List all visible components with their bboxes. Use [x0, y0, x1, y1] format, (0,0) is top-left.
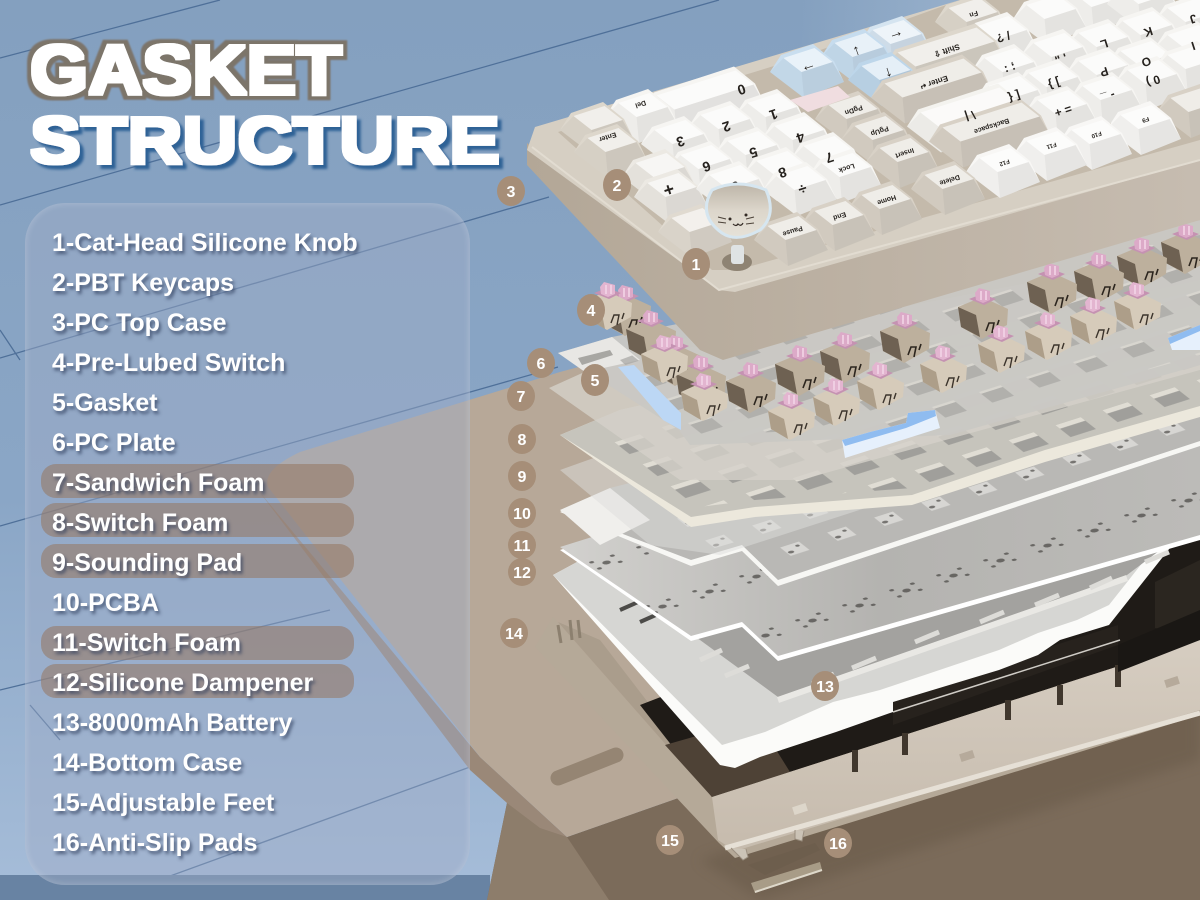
- part 2: keycaps: →: [844, 42, 865, 61]
- part 2: keycaps: +: [661, 179, 677, 201]
- part 2: keycaps: ; :: [1003, 60, 1018, 77]
- part 2: keycaps: 1: [767, 106, 780, 124]
- item 1: 1-Cat-Head Silicone Knob: [52, 229, 358, 257]
- part 2: keycaps: 5: [747, 144, 760, 162]
- part 2: keycaps: = +: [1053, 101, 1074, 120]
- part 12: silicone dampener: [553, 400, 1200, 768]
- stamped metal layer: [590, 420, 1200, 700]
- numbered markers: [497, 169, 852, 858]
- part 2: keycaps: 8: [776, 164, 789, 182]
- item 5: 5-Gasket: [52, 389, 158, 417]
- part 2: keycaps: Shift ⇧: [933, 42, 961, 59]
- part 4: switches: [585, 223, 1200, 440]
- part 13: battery: [893, 560, 1200, 725]
- part 10: PCBA: [560, 338, 1200, 586]
- numbered markers: 8: [518, 432, 527, 449]
- numbered markers: 1: [692, 257, 701, 274]
- item 9: 9-Sounding Pad: [52, 549, 242, 577]
- item 13: 13-8000mAh Battery: [52, 709, 292, 737]
- part 2: keycaps: P: [1098, 64, 1110, 80]
- part 2: keycaps: 0 ): [1144, 72, 1162, 90]
- part 2: keycaps: Fn: [968, 9, 979, 18]
- part 1: cat-head silicone knob: [706, 184, 770, 271]
- item 2: 2-PBT Keycaps: [52, 269, 234, 297]
- highlight: sandwich foam: [41, 464, 354, 498]
- part 15: adjustable feet: [731, 830, 804, 860]
- part 2: keycaps: F9: [1140, 115, 1150, 123]
- numbered markers: 3: [507, 184, 516, 201]
- numbered markers: 12: [513, 565, 531, 582]
- numbered markers: 5: [591, 373, 600, 390]
- part 2: keycaps: 7: [823, 149, 836, 167]
- part 2: keycaps: O: [1140, 54, 1153, 70]
- numbered markers: 14: [505, 626, 523, 643]
- part 2: keycaps: Insert: [894, 146, 915, 159]
- item 8: 8-Switch Foam: [52, 509, 228, 537]
- part 2: keycaps: F10: [1090, 129, 1102, 139]
- part 2: keycaps: Del: [634, 98, 647, 108]
- part 7: sandwich foam: [549, 250, 1200, 480]
- part 2: keycaps: / ?: [994, 28, 1012, 46]
- part 2: keycaps: PgDn: [844, 103, 863, 116]
- part 2: keycaps: 3: [674, 133, 687, 151]
- part 2: keycaps: - _: [1099, 88, 1117, 106]
- numbered markers: 10: [513, 506, 531, 523]
- highlight: switch foam: [41, 503, 354, 537]
- part 2: keycaps: J: [1188, 11, 1199, 26]
- part 2: keycaps: →: [880, 62, 901, 81]
- part 14: bottom case: [535, 540, 1200, 858]
- part 9: sounding pad: [560, 310, 1200, 555]
- numbered markers: 4: [587, 303, 596, 320]
- item 6: 6-PC Plate: [52, 429, 176, 457]
- numbered markers: 13: [816, 679, 834, 696]
- part 2: keycaps: L: [1099, 36, 1110, 52]
- numbered markers: 11: [514, 538, 531, 555]
- item 12: 12-Silicone Dampener: [52, 669, 313, 697]
- part 2: keycaps: ÷: [796, 179, 809, 198]
- part 2: keycaps: Backspace: [973, 116, 1010, 134]
- item 14: 14-Bottom Case: [52, 749, 242, 777]
- part 2: keycaps: F11: [1045, 141, 1057, 150]
- part 2: keycaps: 4: [794, 129, 807, 147]
- part 2: keycaps: Home: [876, 193, 897, 206]
- part 2: keycaps: ] }: [1046, 75, 1062, 92]
- part 2: keycaps: 6: [700, 158, 713, 176]
- part 2: keycaps: Enter ↵: [918, 74, 949, 91]
- numbered markers: 16: [829, 836, 847, 853]
- part 2: keycaps: End: [832, 210, 847, 221]
- title: STRUCTURE: [30, 103, 500, 177]
- part 2: keycaps: Delete: [938, 173, 961, 186]
- part 2: keycaps: I: [1189, 39, 1197, 53]
- highlight: sounding pad: [41, 544, 354, 578]
- item 3: 3-PC Top Case: [52, 309, 227, 337]
- part 2: keycaps: Pause: [781, 224, 803, 237]
- title: GASKET: [30, 31, 342, 109]
- part 2: keycaps: K: [1142, 24, 1155, 40]
- part 2: keycaps: Lock: [838, 162, 855, 173]
- item 11: 11-Switch Foam: [52, 629, 241, 657]
- table: [258, 200, 1200, 900]
- part 2: keycaps: →: [800, 59, 819, 80]
- highlight: silicone dampener: [41, 664, 354, 698]
- part 5: gaskets: [618, 325, 1200, 458]
- numbered markers: 6: [537, 356, 546, 373]
- part 6: PC plate: [558, 220, 1200, 445]
- part 2: keycaps: →: [886, 22, 905, 43]
- part 2: keycaps: 0: [735, 81, 748, 99]
- part 2: keycaps: [560, 0, 1200, 266]
- numbered markers: 15: [661, 833, 679, 850]
- item 4: 4-Pre-Lubed Switch: [52, 349, 285, 377]
- highlight: switch foam 2: [41, 626, 354, 660]
- part 2: keycaps: ' ": [1051, 45, 1067, 62]
- numbered markers: 7: [517, 389, 526, 406]
- numbered markers: 9: [518, 469, 527, 486]
- part 2: keycaps: 9: [729, 178, 742, 196]
- part 3: top case: [527, 0, 1200, 360]
- part 2: keycaps: \ |: [963, 108, 977, 124]
- part 2: keycaps: PgUp: [870, 124, 889, 137]
- item 10: 10-PCBA: [52, 589, 159, 617]
- item 7: 7-Sandwich Foam: [52, 469, 265, 497]
- part 2: keycaps: F12: [998, 157, 1010, 167]
- part 11: switch foam: [560, 392, 1200, 661]
- item 15: 15-Adjustable Feet: [52, 789, 274, 817]
- numbered markers: 2: [613, 178, 622, 195]
- part 2: keycaps: [ {: [1006, 88, 1022, 105]
- panel: parts list: [25, 203, 470, 885]
- item 16: 16-Anti-Slip Pads: [52, 829, 258, 857]
- part 16: anti-slip pad: [748, 843, 822, 893]
- part 2: keycaps: Enter: [598, 130, 617, 143]
- title: [30, 31, 500, 177]
- part 2: keycaps: 2: [720, 118, 733, 136]
- part 8: switch foam: [560, 280, 1200, 527]
